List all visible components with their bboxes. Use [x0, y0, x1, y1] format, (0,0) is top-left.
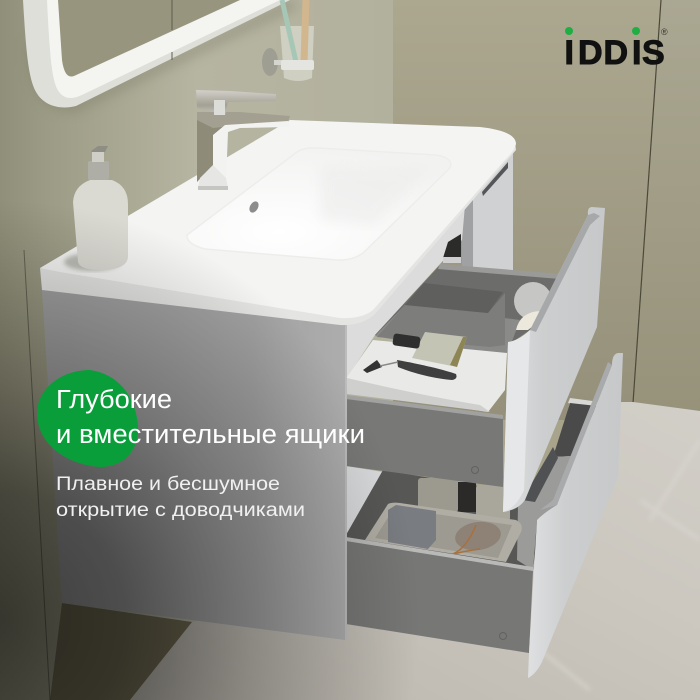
faucet spout	[213, 121, 289, 182]
logo dot left	[565, 27, 573, 35]
back wall, right	[390, 0, 700, 420]
mirror outer frame	[23, 0, 290, 107]
cabinet under-counter light panel	[345, 205, 465, 500]
drawer rim back	[438, 264, 562, 279]
drawer carcass panel	[346, 466, 383, 535]
left wall corner line	[24, 250, 50, 700]
pumice stone	[453, 519, 503, 553]
soap	[388, 505, 436, 549]
drawer side rim	[346, 537, 533, 572]
dark text backdrop	[0, 180, 430, 700]
basin	[187, 148, 451, 260]
basin shadow	[320, 165, 430, 225]
green blob	[37, 370, 138, 467]
mirror shadow	[26, 0, 300, 112]
drawer front panel	[528, 353, 623, 678]
cabinet body front	[42, 290, 345, 640]
toothbrush green	[282, 0, 296, 62]
towel lower fold	[347, 378, 490, 412]
lower drawer	[346, 353, 623, 678]
ball sponge	[514, 282, 552, 320]
wall panel on the right	[633, 0, 700, 412]
drawer side	[346, 541, 533, 653]
cabinet side strip	[462, 197, 473, 268]
perfume cap	[392, 333, 421, 349]
drawer rear rim	[568, 398, 600, 407]
pump head	[91, 146, 108, 152]
drawer floor	[375, 305, 520, 358]
pumice cord	[453, 525, 480, 554]
countertop	[40, 120, 516, 318]
floor	[130, 402, 700, 700]
drain overflow	[248, 200, 260, 214]
pump collar	[88, 161, 109, 180]
razor head	[363, 360, 382, 373]
drawer screw	[472, 466, 478, 474]
drawer side	[346, 399, 503, 487]
razor neck	[380, 362, 398, 366]
faucet base	[198, 165, 228, 188]
soap dispenser	[64, 146, 128, 271]
drawer front panel	[503, 207, 605, 512]
candle right	[476, 485, 510, 521]
cabinet inner dark gap	[443, 234, 461, 258]
subheading line 1: Плавное и бесшумное	[56, 474, 280, 495]
heading line 2: и вместительные ящики	[56, 421, 365, 449]
drawer rear wall	[553, 403, 597, 457]
tray inner	[375, 508, 512, 558]
drawer screw	[500, 632, 506, 640]
towel	[347, 340, 507, 412]
drawer interior	[346, 470, 540, 570]
holder arm	[274, 60, 292, 65]
drawer interior back	[375, 265, 560, 345]
mirror glass	[58, 0, 240, 76]
drawer side rim	[346, 395, 503, 420]
razor	[397, 360, 456, 380]
bottle body	[73, 180, 128, 270]
tray	[365, 503, 522, 562]
drawer front inner curve	[540, 362, 612, 510]
wall mount disc	[262, 48, 278, 76]
toothbrush wood	[304, 0, 306, 62]
faucet lever	[196, 90, 276, 115]
perfume gold edge	[450, 337, 467, 367]
dark gap between candles	[458, 482, 476, 512]
right cabinet side	[462, 150, 513, 270]
heading	[56, 386, 365, 449]
front left highlight	[503, 330, 530, 512]
faucet base plate	[198, 186, 228, 190]
cabinet side panel	[462, 150, 513, 270]
drawer front inner curve	[530, 213, 600, 332]
white sponge	[516, 311, 540, 330]
logo wordmark: IDDIS	[564, 34, 665, 72]
subheading line 2: открытие с доводчиками	[56, 500, 305, 521]
heading line 1: Глубокие	[56, 386, 172, 414]
countertop edge	[40, 142, 516, 325]
upper drawer	[346, 207, 605, 512]
pump stem	[92, 151, 104, 162]
cabinet white ledge	[443, 257, 461, 263]
registered mark: ®	[661, 27, 668, 37]
mirror led band	[47, 0, 280, 98]
perfume bottle	[412, 332, 467, 367]
drawer floor right	[517, 456, 572, 570]
cabinet vertical edge	[345, 325, 347, 640]
under-cabinet wall	[50, 603, 192, 700]
glass ring	[281, 60, 314, 70]
floor veining	[540, 440, 700, 690]
faucet dark body	[197, 112, 226, 182]
candle left	[418, 478, 458, 512]
toothbrush glass holder	[262, 0, 314, 81]
cabinet handle slot	[482, 162, 508, 196]
grey textile	[522, 447, 558, 502]
glass	[280, 26, 314, 81]
faucet	[196, 90, 290, 190]
faucet top chrome band	[197, 112, 290, 128]
subheading	[56, 474, 305, 521]
side wall, left	[0, 0, 393, 700]
mirror	[23, 0, 300, 112]
logo dot right	[632, 27, 640, 35]
faucet stem highlight	[214, 100, 225, 115]
logo	[564, 27, 668, 72]
storage bin	[377, 293, 505, 347]
bottle shadow	[64, 253, 120, 271]
mirror glass seam	[171, 0, 173, 60]
wall panel seam	[633, 0, 661, 403]
bin opening	[405, 283, 503, 313]
